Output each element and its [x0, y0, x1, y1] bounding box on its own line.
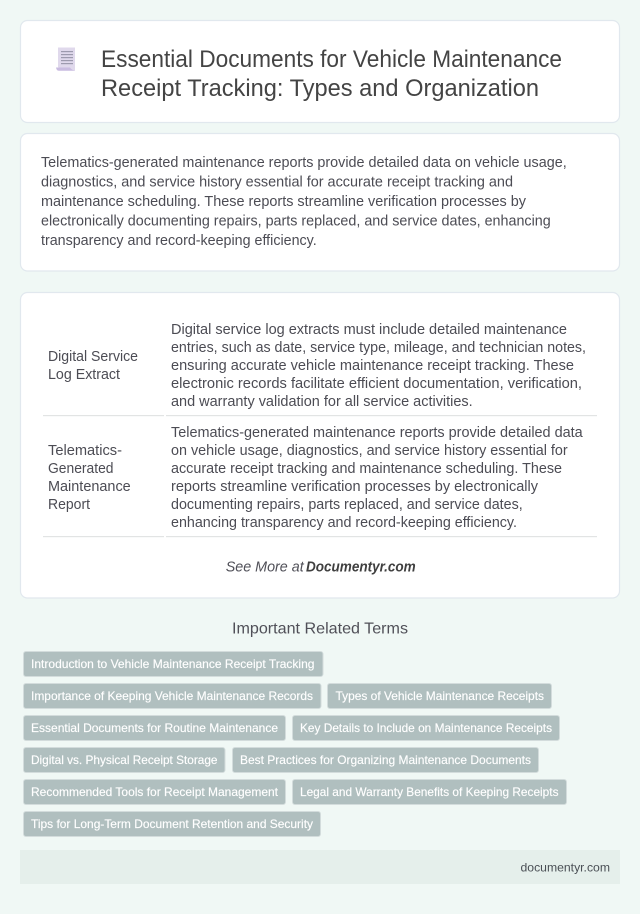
tag: digital vs physical [24, 748, 225, 772]
tag: introduction [24, 652, 323, 676]
table row: telematics-generated maintenance report: enhancing transparency and record-keeping efficiency. [171, 515, 517, 531]
text block: intro paragraph [41, 155, 567, 249]
tag: digital vs physical: Digital vs. Physical Receipt Storage [31, 753, 218, 767]
icon: receipt document [56, 48, 75, 71]
table row: telematics-generated maintenance report: Report [48, 497, 90, 513]
table row: telematics-generated maintenance report [43, 425, 597, 537]
table row: telematics-generated maintenance report: Telematics- [48, 443, 122, 459]
text block: intro paragraph: transparency and record-keeping efficiency. [41, 233, 317, 249]
table row: telematics-generated maintenance report: accurate receipt tracking and maintenance scheduling. These [171, 461, 562, 477]
table row: digital service log extract: Log Extract [48, 367, 120, 383]
panel: title card [20, 20, 620, 122]
table row: digital service log extract: Digital service log extracts must include detailed maintenance [171, 322, 567, 338]
tag: introduction: Introduction to Vehicle Maintenance Receipt Tracking [31, 657, 314, 671]
table row: telematics-generated maintenance report: on vehicle usage, diagnostics, and service history essential for [171, 443, 568, 459]
tag: types: Types of Vehicle Maintenance Receipts [336, 689, 544, 703]
tag: importance: Importance of Keeping Vehicle Maintenance Records [31, 689, 313, 703]
footer: documentyr.com [520, 860, 610, 874]
tag: tips: Tips for Long-Term Document Retention and Security [31, 817, 313, 831]
tag: recommended tools: Recommended Tools for Receipt Management [31, 785, 279, 799]
see more link [226, 560, 416, 576]
table row: digital service log extract: electronic records facilitate efficient documentation, verification, [171, 376, 582, 392]
title: Essential Documents for Vehicle Maintenance [101, 46, 562, 73]
tag: essential documents [24, 716, 286, 740]
text block: intro paragraph: Telematics-generated maintenance reports provide detailed data on vehicle usage, [41, 155, 567, 171]
table row: digital service log extract [43, 322, 597, 416]
panel: documents table [20, 292, 620, 598]
panel: introduction [20, 134, 620, 271]
tag: best practices [232, 748, 538, 772]
text block: intro paragraph: diagnostics, and service history essential for accurate receipt tracking and [41, 174, 513, 190]
table row: telematics-generated maintenance report: Generated [48, 461, 114, 477]
see more link: See More at [226, 560, 305, 576]
tag: key details: Key Details to Include on Maintenance Receipts [300, 721, 552, 735]
heading: important related terms: Important Related Terms [232, 620, 408, 638]
table row: digital service log extract: entries, such as date, service type, mileage, and technician notes, [171, 340, 586, 356]
related terms tags [24, 652, 566, 836]
text block: intro paragraph: maintenance scheduling. These reports streamline verification processes by [41, 194, 527, 210]
table row: digital service log extract: and warranty validation for all service activities. [171, 394, 473, 410]
tag: key details [292, 716, 560, 740]
title [101, 46, 562, 102]
see more link: Documentyr.com [306, 560, 416, 576]
table row: digital service log extract: ensuring accurate vehicle maintenance receipt tracking. These [171, 358, 574, 374]
tag: best practices: Best Practices for Organizing Maintenance Documents [240, 753, 531, 767]
table row: telematics-generated maintenance report: Telematics-generated maintenance reports provide detailed data [171, 425, 583, 441]
tag: types [328, 684, 552, 708]
tag: recommended tools [24, 780, 286, 804]
text block: intro paragraph: electronically documenting repairs, parts replaced, and service dates, enhancing [41, 214, 551, 230]
table row: digital service log extract: Digital Service [48, 349, 138, 365]
tag: importance [24, 684, 321, 708]
tag: legal and warranty: Legal and Warranty Benefits of Keeping Receipts [300, 785, 558, 799]
tag: tips [24, 812, 320, 836]
footer [20, 850, 620, 884]
table row: telematics-generated maintenance report: documenting repairs, parts replaced, and service dates, [171, 497, 523, 513]
table row: telematics-generated maintenance report: reports streamline verification processes by electronically [171, 479, 539, 495]
tag: essential documents: Essential Documents for Routine Maintenance [31, 721, 278, 735]
tag: legal and warranty [292, 780, 566, 804]
table row: telematics-generated maintenance report: Maintenance [48, 479, 131, 495]
title: Receipt Tracking: Types and Organization [101, 75, 539, 102]
